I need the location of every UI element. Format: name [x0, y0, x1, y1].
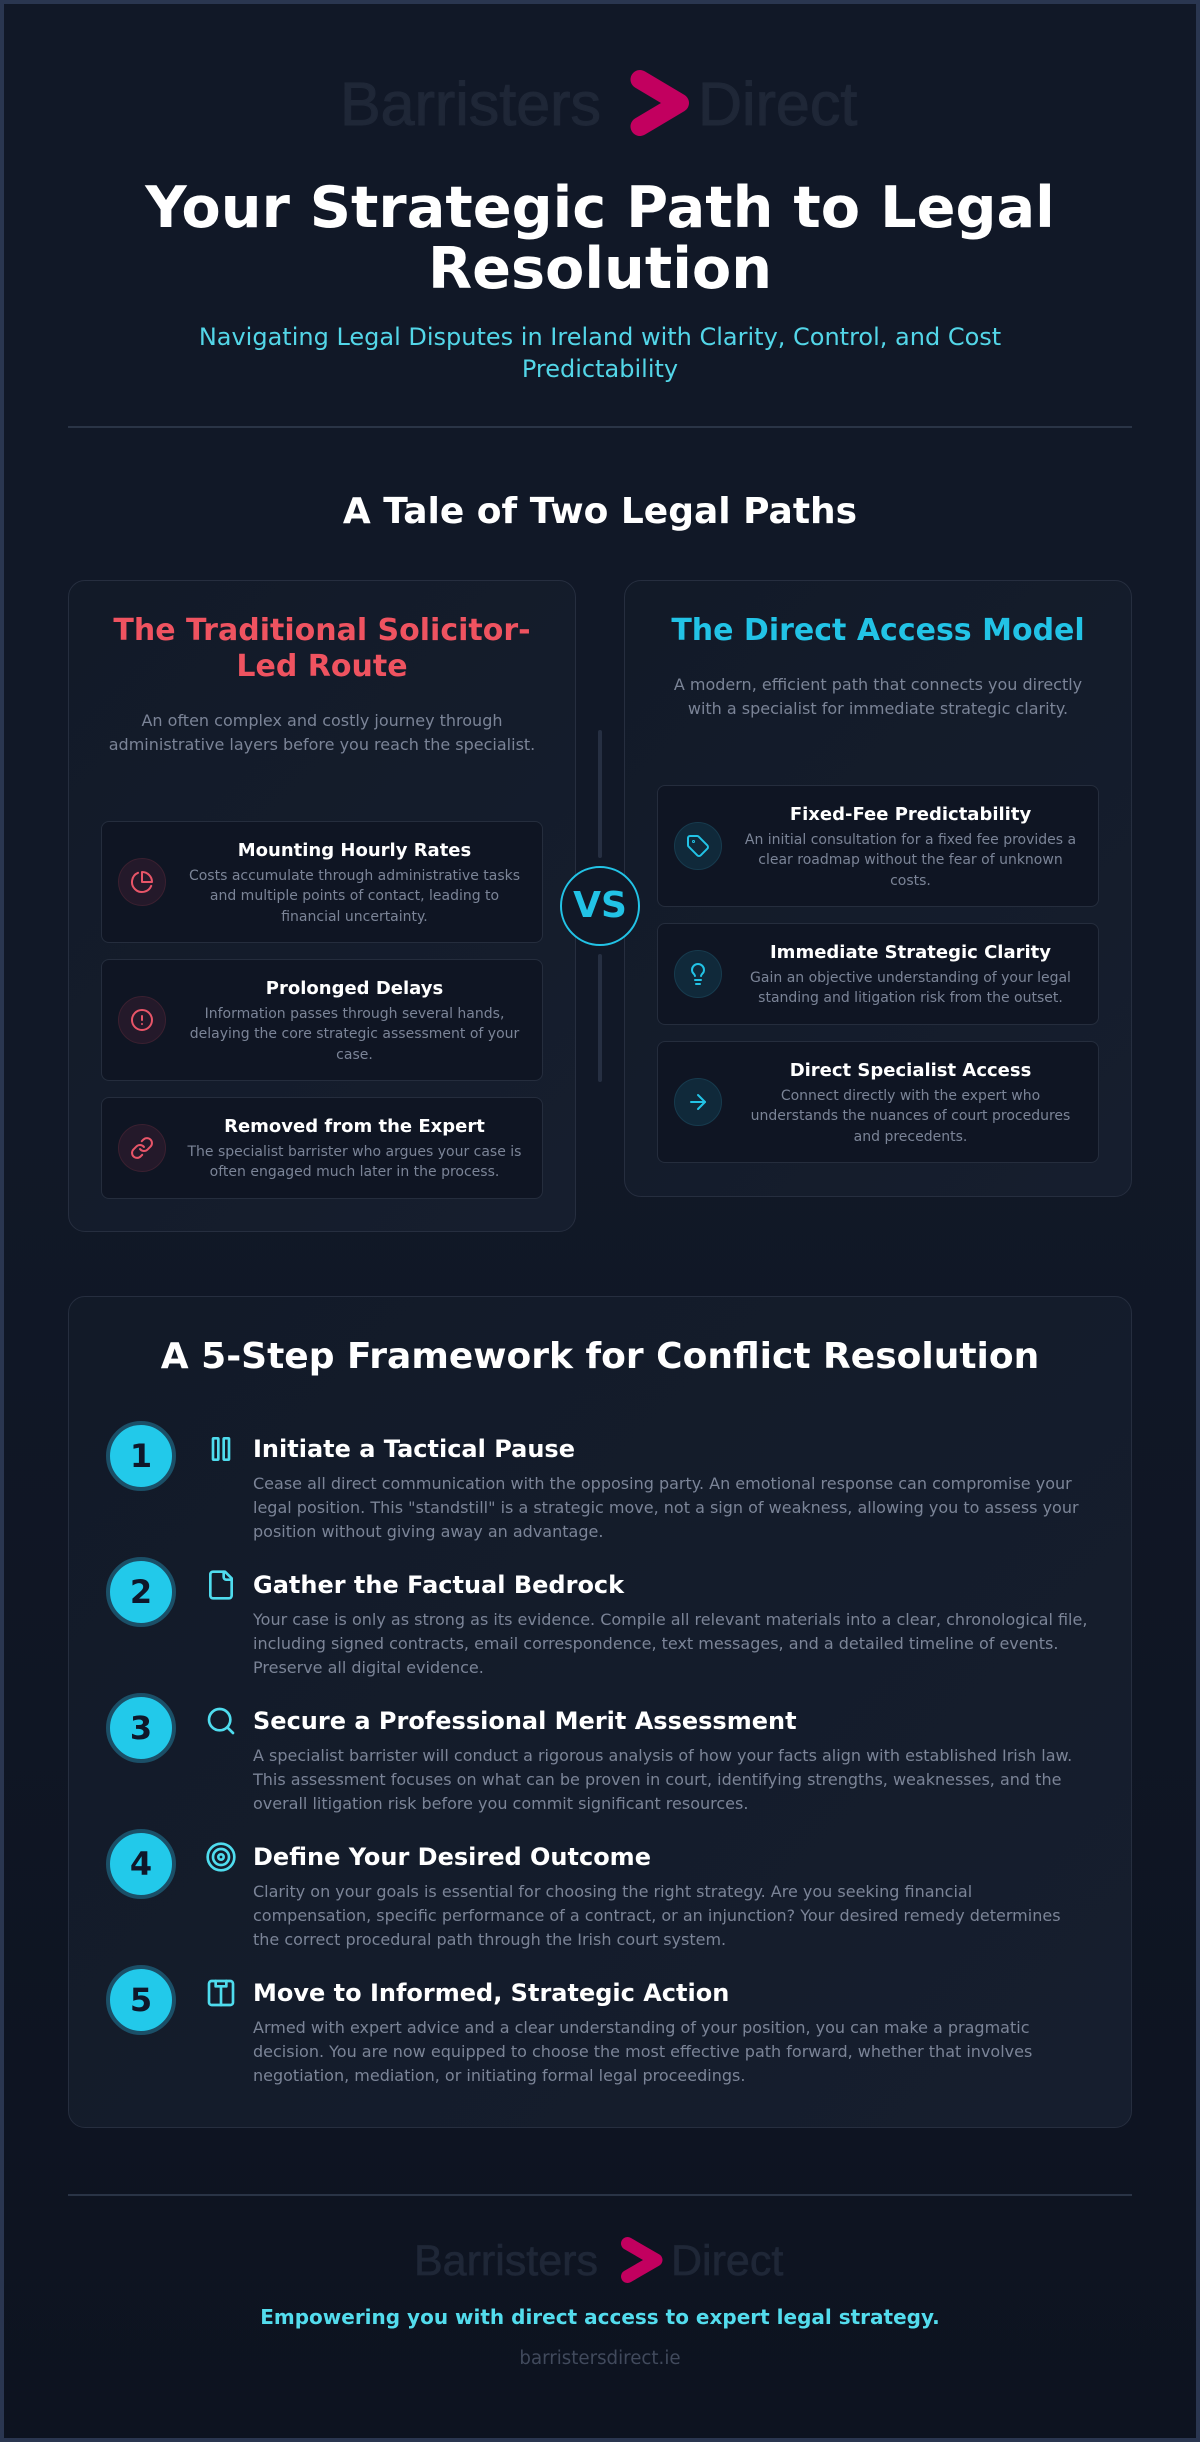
step number 5: [106, 1965, 176, 2035]
panel heading: [113, 613, 531, 684]
title: [144, 174, 1055, 302]
step number 2: [106, 1557, 176, 1627]
card text: and precedents.: [854, 1129, 967, 1145]
icon: link: [118, 1124, 166, 1172]
card text: understands the nuances of court procedures: [751, 1108, 1070, 1124]
step number 1: [106, 1421, 176, 1491]
subtitle: Predictability: [522, 355, 678, 383]
step number 3: [106, 1693, 176, 1763]
step 3 text: A specialist barrister will conduct a rigorous analysis of how your facts align with established Irish law.: [253, 1746, 1072, 1765]
step 2 text: Preserve all digital evidence.: [253, 1658, 484, 1677]
icon: pause: [212, 1437, 230, 1461]
step number 5: 5: [130, 1981, 152, 2019]
panel heading: The Direct Access Model: [671, 613, 1085, 648]
step 4 text: the correct procedural path through the Irish court system.: [253, 1930, 726, 1949]
step 2 text: [253, 1610, 1087, 1677]
step 1 text: [253, 1474, 1079, 1541]
card text: case.: [336, 1047, 373, 1063]
card text: Information passes through several hands,: [205, 1006, 504, 1022]
subtitle: [199, 323, 1001, 383]
card text: Direct Specialist Access: [790, 1060, 1031, 1081]
vs badge: VS: [573, 885, 627, 926]
card text: Costs accumulate through administrative tasks: [189, 868, 520, 884]
step 3 text: overall litigation risk before you commit significant resources.: [253, 1794, 748, 1813]
icon: lightbulb: [674, 950, 722, 998]
title: Resolution: [428, 235, 772, 302]
card text: An initial consultation for a fixed fee provides a: [745, 832, 1076, 848]
logo word: Direct: Direct: [698, 70, 857, 138]
card: fixed-fee: [657, 785, 1099, 907]
icon: pie chart: [118, 858, 166, 906]
panel description: An often complex and costly journey through: [141, 711, 502, 730]
panel description: [109, 711, 535, 754]
step 5 text: [253, 2018, 1032, 2085]
card text: standing and litigation risk from the outset.: [758, 990, 1063, 1006]
subtitle: Navigating Legal Disputes in Ireland with Clarity, Control, and Cost: [199, 323, 1001, 351]
section heading: two paths: A Tale of Two Legal Paths: [343, 490, 857, 532]
panel heading: The Traditional Solicitor-: [113, 613, 531, 648]
card text: [745, 804, 1076, 889]
icon: search: [208, 1708, 234, 1734]
card text: [189, 840, 520, 925]
step 2 text: Your case is only as strong as its evidence. Compile all relevant materials into a clear, chronological file,: [253, 1610, 1087, 1629]
card text: costs.: [890, 873, 931, 889]
step 4 text: Clarity on your goals is essential for choosing the right strategy. Are you seeking financial: [253, 1882, 972, 1901]
step number 1: 1: [130, 1437, 152, 1475]
step 5 text: negotiation, mediation, or initiating formal legal proceedings.: [253, 2066, 745, 2085]
step 5: [106, 1965, 1032, 2085]
footer logo: [414, 2237, 784, 2285]
step 1: [106, 1421, 1079, 1541]
footer logo word: Direct: Direct: [671, 2237, 783, 2285]
card: immediate clarity: [657, 923, 1099, 1025]
step 3 text: This assessment focuses on what can be proven in court, identifying strengths, weaknesses, and the: [253, 1770, 1061, 1789]
card text: [190, 978, 520, 1063]
card text: Removed from the Expert: [224, 1116, 485, 1137]
card text: Gain an objective understanding of your legal: [750, 970, 1071, 986]
step 3: [106, 1693, 1072, 1813]
card text: [187, 1116, 521, 1180]
panel description: [674, 675, 1082, 718]
step 2: [106, 1557, 1087, 1677]
card text: financial uncertainty.: [281, 909, 428, 925]
card text: clear roadmap without the fear of unknown: [758, 852, 1063, 868]
panel: traditional route: [68, 580, 576, 1232]
step number 3: 3: [130, 1709, 152, 1747]
card text: Immediate Strategic Clarity: [770, 942, 1051, 963]
step 5 text: decision. You are now equipped to choose the most effective path forward, whether that involves: [253, 2042, 1032, 2061]
card text: [751, 1060, 1070, 1145]
footer tagline: Empowering you with direct access to expert legal strategy.: [260, 2305, 940, 2329]
panel: 5-step framework: [68, 1296, 1132, 2128]
step 2 heading: Gather the Factual Bedrock: [253, 1571, 624, 1599]
step 5 heading: Move to Informed, Strategic Action: [253, 1979, 729, 2007]
panel description: A modern, efficient path that connects you directly: [674, 675, 1082, 694]
card: direct specialist access: [657, 1041, 1099, 1163]
vs badge: [560, 866, 640, 946]
step 5 text: Armed with expert advice and a clear understanding of your position, you can make a pragmatic: [253, 2018, 1029, 2037]
framework heading: A 5-Step Framework for Conflict Resolution: [161, 1336, 1039, 1377]
step 1 text: legal position. This "standstill" is a strategic move, not a sign of weakness, allowing you to assess your: [253, 1498, 1079, 1517]
step 4 text: [253, 1882, 1061, 1949]
panel: direct access: [624, 580, 1132, 1197]
icon: file: [209, 1570, 233, 1600]
step 1 text: Cease all direct communication with the opposing party. An emotional response can compromise your: [253, 1474, 1072, 1493]
card text: Prolonged Delays: [266, 978, 443, 999]
step number 4: [106, 1829, 176, 1899]
card text: Connect directly with the expert who: [781, 1088, 1040, 1104]
card text: delaying the core strategic assessment of your: [190, 1026, 519, 1042]
panel description: with a specialist for immediate strategic clarity.: [688, 699, 1068, 718]
title: Your Strategic Path to Legal: [145, 174, 1055, 241]
card text: The specialist barrister who argues your case is: [188, 1144, 521, 1160]
card text: [750, 942, 1071, 1006]
step 3 heading: Secure a Professional Merit Assessment: [253, 1707, 797, 1735]
footer url: barristersdirect.ie: [519, 2348, 681, 2369]
step 4: [106, 1829, 1061, 1949]
vs divider: [560, 730, 640, 1082]
lower line: [598, 954, 602, 1082]
step number 2: 2: [130, 1573, 152, 1611]
card text: often engaged much later in the process.: [210, 1164, 499, 1180]
step 1 heading: Initiate a Tactical Pause: [253, 1435, 575, 1463]
card: removed from the expert: [101, 1097, 543, 1199]
icon: arrow right: [674, 1078, 722, 1126]
step 1 text: position without giving away an advantage.: [253, 1522, 603, 1541]
icon: alert: [118, 996, 166, 1044]
card text: and multiple points of contact, leading to: [210, 888, 499, 904]
logo chevron: [630, 70, 689, 136]
step 4 heading: Define Your Desired Outcome: [253, 1843, 651, 1871]
footer logo word: Barristers: Barristers: [414, 2237, 598, 2285]
icon: target: [206, 1842, 236, 1872]
panel heading: Led Route: [236, 649, 408, 684]
header logo: [340, 70, 858, 138]
logo word: Barristers: Barristers: [340, 70, 601, 138]
panel description: administrative layers before you reach the specialist.: [109, 735, 535, 754]
step 2 text: including signed contracts, email correspondence, text messages, and a detailed timeline of events.: [253, 1634, 1058, 1653]
card: prolonged delays: [101, 959, 543, 1081]
step number 4: 4: [130, 1845, 152, 1883]
card: mounting hourly rates: [101, 821, 543, 943]
step 4 text: compensation, specific performance of a contract, or an injunction? Your desired remedy determines: [253, 1906, 1061, 1925]
icon: framed T: [208, 1980, 234, 2006]
icon: tag: [674, 822, 722, 870]
upper line: [598, 730, 602, 858]
card text: Fixed-Fee Predictability: [790, 804, 1031, 825]
step 3 text: [252, 1746, 1072, 1813]
footer logo chevron: [621, 2237, 662, 2283]
card text: Mounting Hourly Rates: [238, 840, 471, 861]
